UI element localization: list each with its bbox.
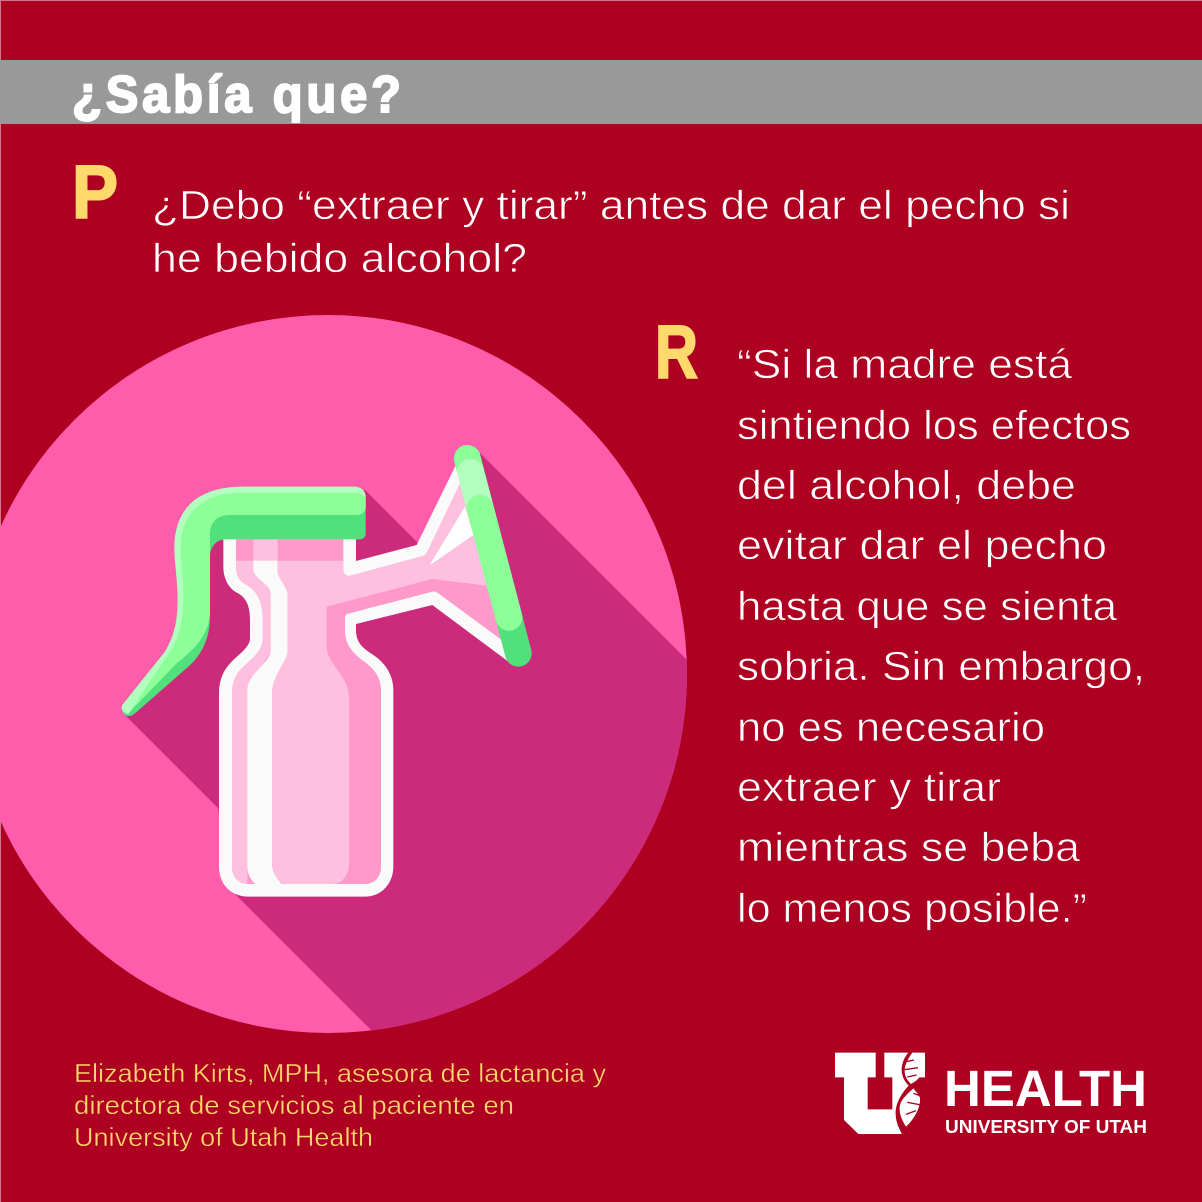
bottle and funnel outline	[219, 460, 508, 897]
pink circle background	[0, 315, 687, 1033]
credit text	[74, 1058, 606, 1152]
credit text: Elizabeth Kirts, MPH, asesora de lactancia y	[74, 1058, 606, 1088]
light pink left sliver	[232, 561, 271, 884]
funnel highlight	[429, 507, 473, 566]
light pink main body and spout	[272, 480, 487, 884]
funnel rim	[467, 458, 518, 653]
credit text: directora de servicios al paciente en	[74, 1090, 514, 1120]
answer text: del alcohol, debe	[737, 462, 1076, 508]
answer letter R: R	[655, 310, 698, 394]
answer text: sintiendo los efectos	[737, 402, 1131, 448]
answer text	[737, 341, 1145, 931]
answer text: no es necesario	[737, 704, 1045, 750]
question text	[152, 182, 1070, 281]
answer text: extraer y tirar	[737, 764, 1001, 810]
answer text: hasta que se sienta	[737, 583, 1117, 629]
illustration: breast pump in pink circle	[0, 315, 700, 1040]
question text: ¿Debo “extraer y tirar” antes de dar el pecho si	[152, 182, 1070, 228]
logo wordmark University of Utah: UNIVERSITY OF UTAH	[945, 1117, 1147, 1137]
answer text: sobria. Sin embargo,	[737, 643, 1145, 689]
answer text: “Si la madre está	[737, 341, 1072, 387]
pump handle	[122, 487, 366, 716]
credit text: University of Utah Health	[74, 1122, 373, 1152]
question letter P: P	[72, 150, 118, 234]
icon: block U with DNA helix	[835, 1053, 925, 1134]
answer text: mientras se beba	[737, 824, 1080, 870]
logo wordmark HEALTH: HEALTH	[944, 1060, 1147, 1117]
answer text: evitar dar el pecho	[737, 522, 1107, 568]
heading: ¿Sabía que?: ¿Sabía que?	[72, 65, 401, 123]
header band	[0, 60, 1202, 124]
icon: breast pump	[122, 458, 518, 897]
answer text: lo menos posible.”	[737, 885, 1087, 931]
bottle interior	[232, 480, 502, 884]
white reflection band	[247, 561, 288, 885]
logo: University of Utah Health	[835, 1053, 1147, 1137]
long shadow	[125, 453, 700, 1040]
question text: he bebido alcohol?	[152, 235, 527, 281]
